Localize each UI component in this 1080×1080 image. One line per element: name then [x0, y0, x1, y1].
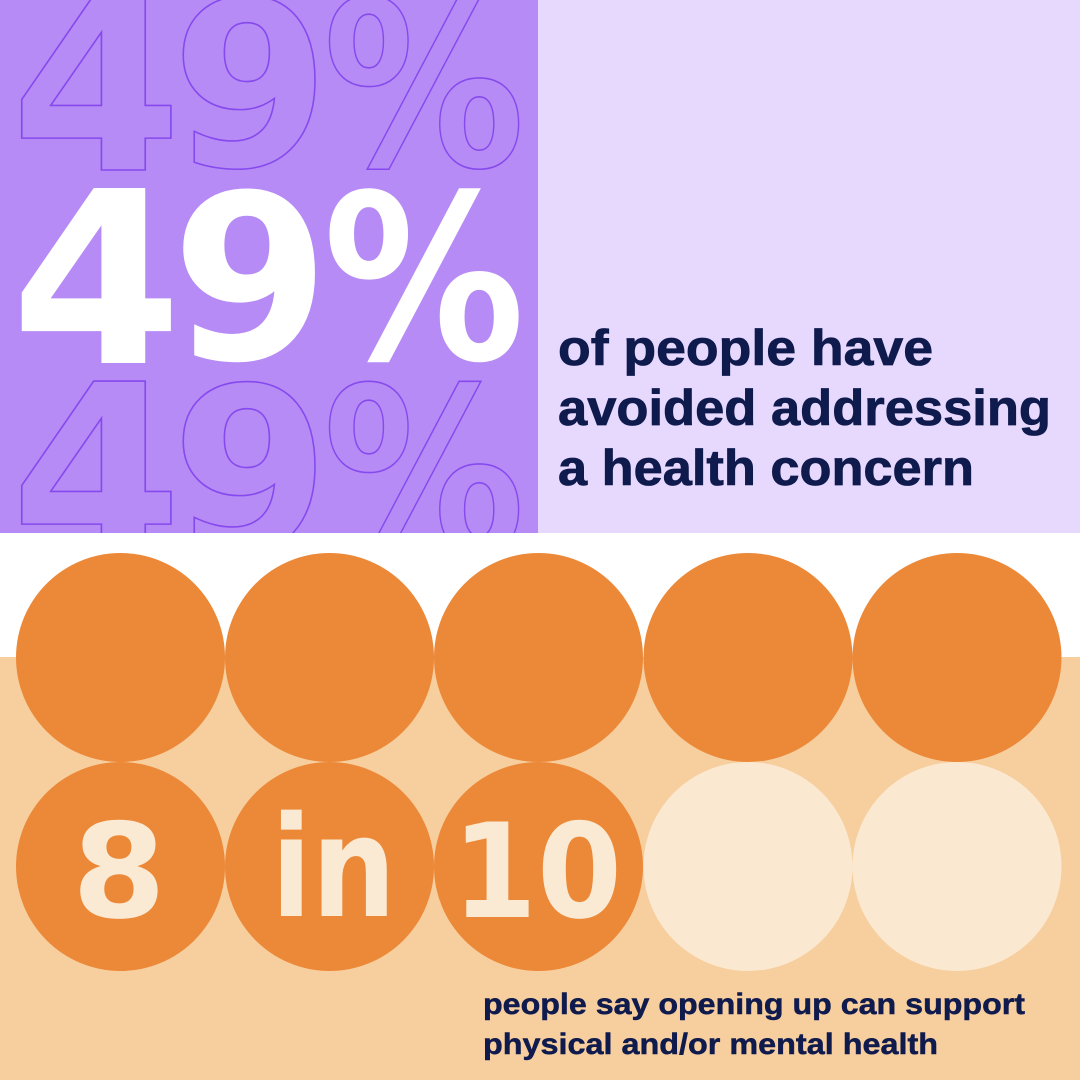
label: 8 in 10: 10 [452, 795, 622, 948]
panel: purple statistic [0, 0, 538, 533]
circle grid: 8 of 10 filled [16, 553, 1062, 971]
caption: opening up: physical and/or mental health [483, 1028, 938, 1061]
caption: avoided addressing: of people have [558, 320, 933, 376]
caption: avoided addressing: avoided addressing [558, 380, 1051, 436]
panel: lilac caption background [538, 0, 1080, 533]
outlined 49% bottom: 9 [172, 340, 330, 607]
outlined 49% top [20, 0, 520, 171]
caption: opening up [483, 988, 1025, 1061]
outlined 49% bottom [20, 380, 520, 533]
headline 49%: % [323, 147, 525, 414]
caption: opening up: people say opening up can support [483, 988, 1025, 1021]
label: 8 in 10: in [271, 787, 396, 950]
headline 49% [22, 188, 519, 363]
outlined 49% bottom: % [323, 340, 525, 607]
caption: avoided addressing [558, 320, 1051, 496]
caption: avoided addressing: a health concern [558, 440, 974, 496]
label: 8 in 10 [72, 787, 622, 950]
outlined 49% bottom: 4 [11, 333, 182, 613]
panel: peach background [0, 657, 1080, 1080]
headline 49%: 9 [172, 147, 330, 414]
label: 8 in 10: 8 [72, 795, 166, 948]
headline 49%: 4 [11, 140, 182, 420]
